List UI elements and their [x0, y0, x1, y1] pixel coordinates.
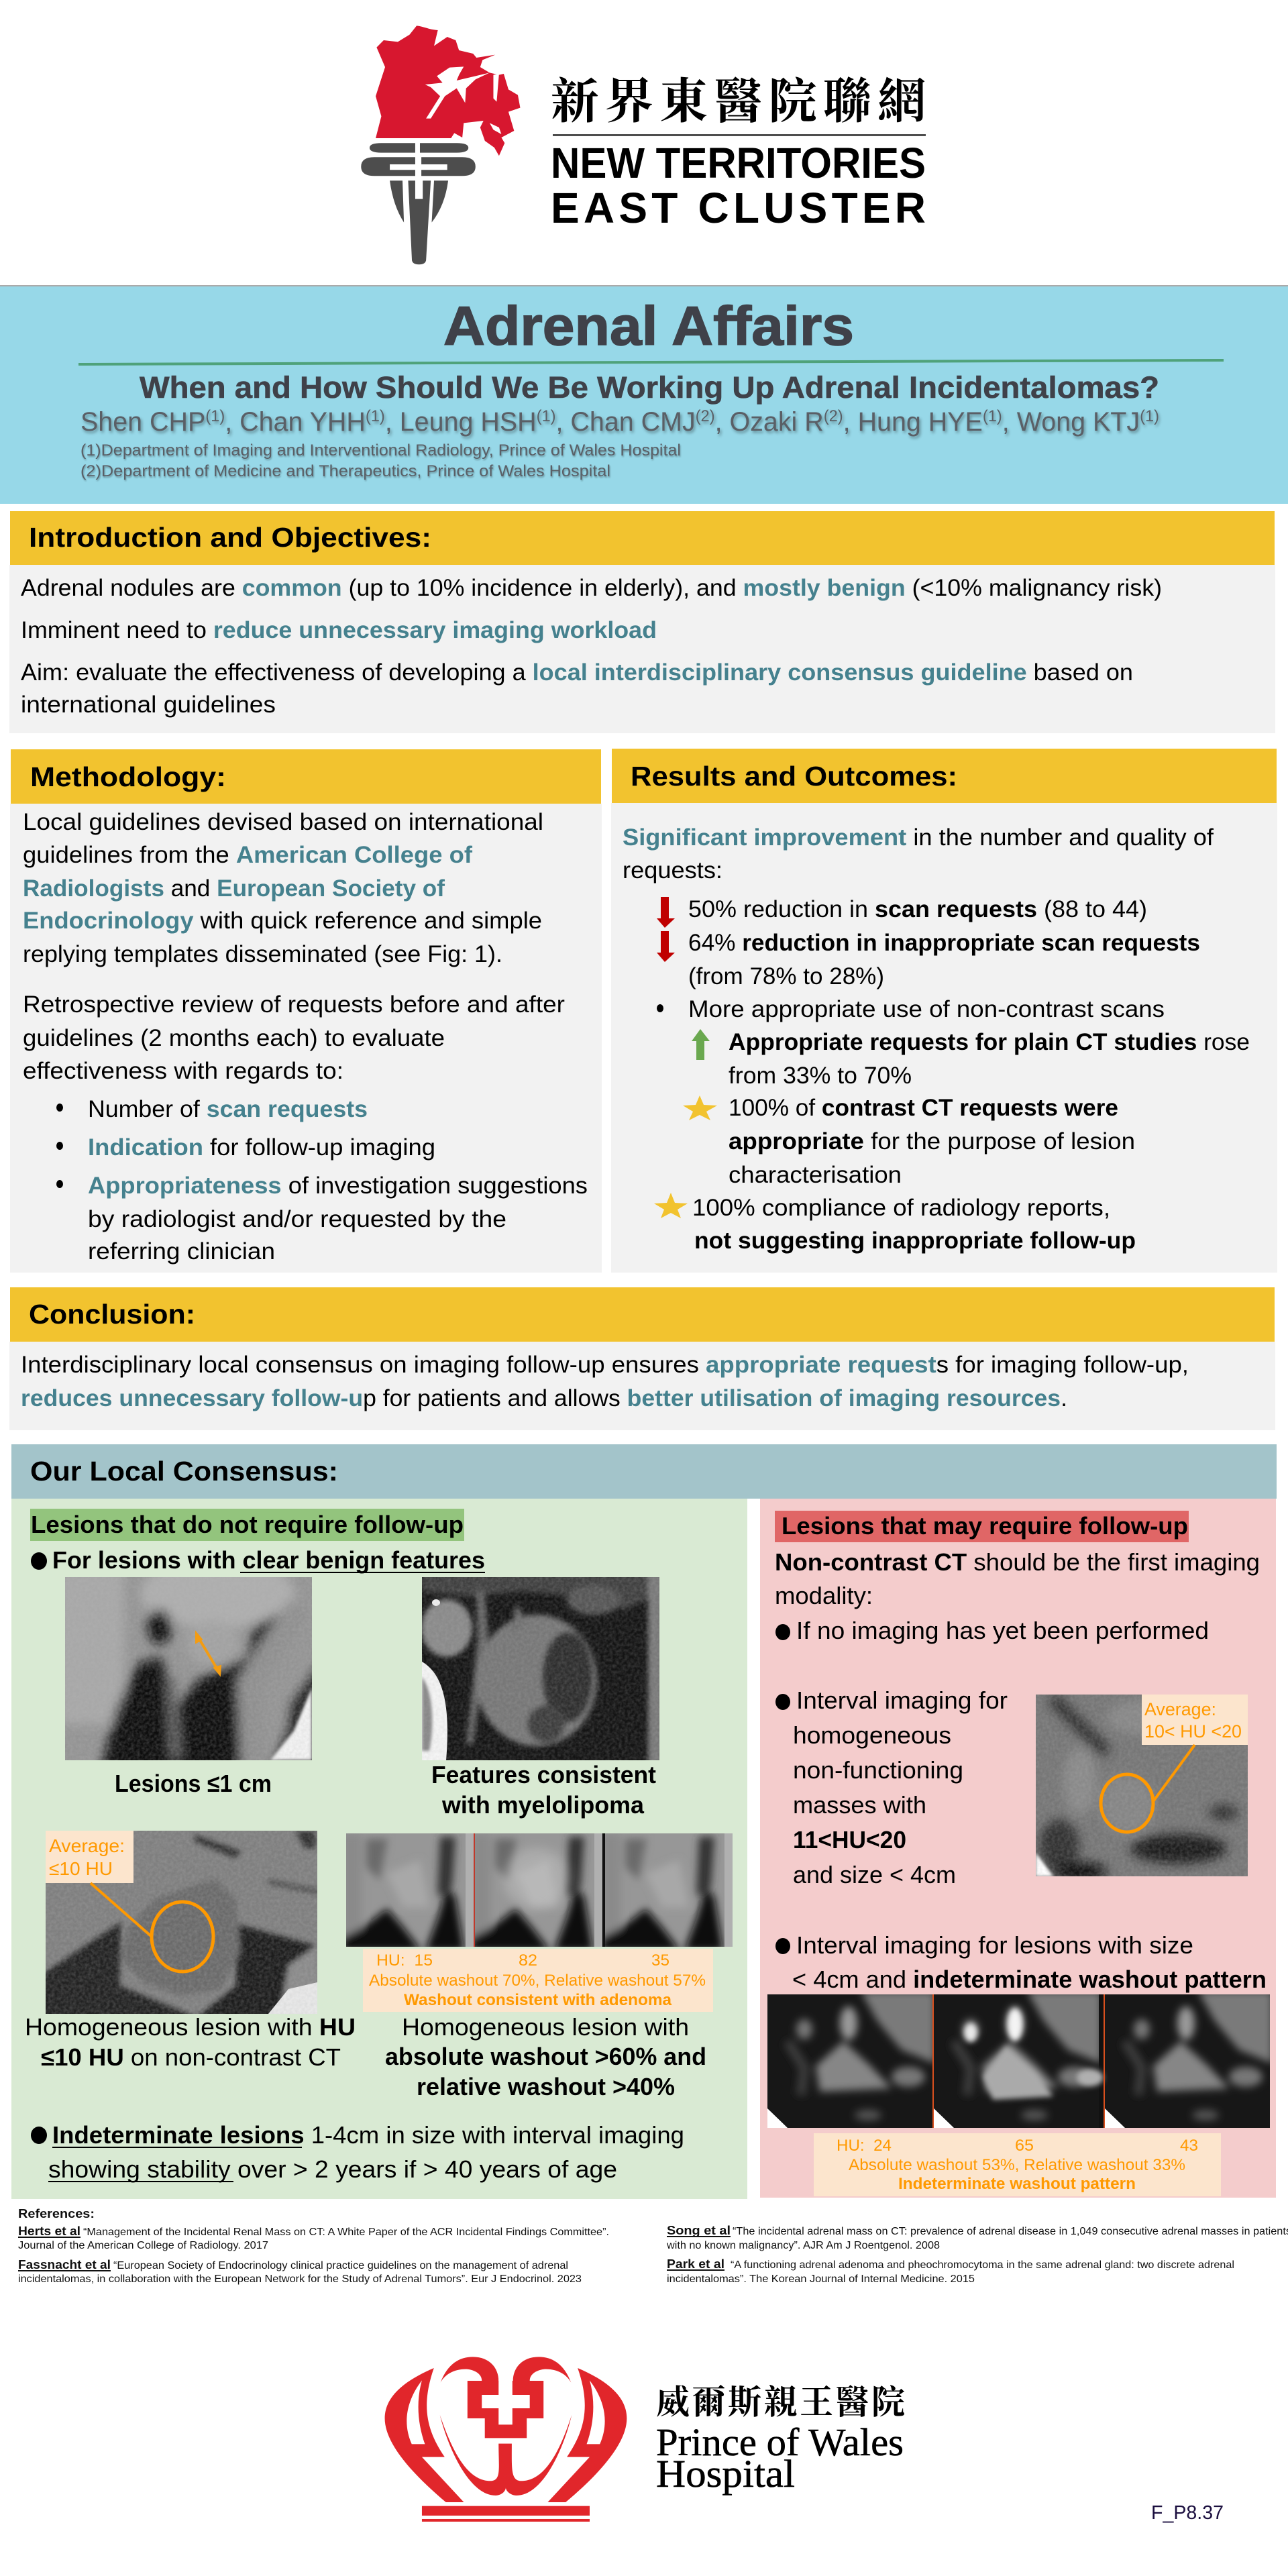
authors: , Hung HYE — [843, 407, 983, 437]
callout: indeterminate washout values: HU: 24 — [837, 2137, 892, 2155]
text block: Endocrinology with quick reference and simple — [23, 908, 542, 934]
reference: Fassnacht: Fassnacht et al — [18, 2258, 111, 2271]
bullet: indeterminate lesions: Indeterminate lesions 1-4cm in size with interval imaging — [52, 2121, 684, 2149]
text block: Adrenal nodules are common (up to 10% incidence in elderly), and mostly benign (<10% malignancy risk) — [21, 575, 1162, 601]
text block: Local guidelines devised based on international — [23, 809, 543, 835]
icon: green up arrow — [692, 1029, 710, 1060]
icon: red down arrow — [657, 897, 675, 928]
icon: hospital emblem — [385, 2357, 627, 2522]
authors: (2) — [696, 407, 715, 425]
panel: conclusion — [9, 1287, 1275, 1430]
heading: References: — [18, 2207, 95, 2220]
text block: from 33% to 70% — [729, 1063, 912, 1089]
reference: Park: Park et al — [667, 2257, 724, 2271]
logo English name: NEW TERRITORIES — [551, 139, 926, 187]
bullet list: by radiologist and/or requested by the — [88, 1206, 506, 1232]
callout: indeterminate washout values — [814, 2133, 1221, 2196]
caption: Lesions ≤1 cm — [115, 1770, 272, 1797]
text block: requests: — [623, 857, 722, 883]
heading: Our Local Consensus: — [30, 1456, 338, 1487]
authors: (2) — [824, 407, 843, 425]
caption: Homogeneous lesion with HU — [25, 2013, 356, 2041]
bullet: indeterminate lesions — [31, 2121, 684, 2183]
authors: , Chan YHH — [225, 407, 366, 437]
callout: average 10 to 20 HU — [1101, 1695, 1248, 1832]
text block: not suggesting inappropriate follow-up — [694, 1228, 1136, 1254]
bullet: homogeneous masses: homogeneous — [793, 1721, 951, 1749]
references — [18, 2207, 1288, 2285]
text block: Imminent need to reduce unnecessary imaging workload — [21, 617, 657, 643]
callout: indeterminate washout values: 65 — [1015, 2137, 1034, 2155]
bullet list: Indication for follow-up imaging — [88, 1134, 435, 1161]
text block: Significant improvement in the number and quality of — [623, 824, 1214, 851]
bullet: indeterminate washout: Interval imaging for lesions with size — [796, 1931, 1193, 1959]
bullet list: Number of scan requests — [88, 1096, 368, 1122]
callout: washout values: 82 — [519, 1951, 537, 1970]
reference: Park — [667, 2257, 1234, 2285]
caption: relative washout >40% — [417, 2073, 675, 2100]
caption — [385, 2013, 706, 2100]
text block: Retrospective review of requests before and after — [23, 991, 565, 1018]
callout: average 10 to 20 HU: 10< HU <20 — [1144, 1721, 1242, 1741]
affiliations: (1)Department of Imaging and Interventional Radiology, Prince of Wales Hospital — [80, 441, 681, 460]
caption: absolute washout >60% and — [385, 2043, 706, 2070]
text block — [21, 1352, 1189, 1411]
text block: Interdisciplinary local consensus on imaging follow-up ensures appropriate request s for imaging follow-up, — [21, 1352, 1189, 1378]
bullet: homogeneous masses: masses with — [793, 1791, 926, 1819]
text block: 50% reduction in scan requests (88 to 44) — [688, 896, 1147, 922]
bullet: indeterminate lesions: showing stability over > 2 years if > 40 years of age — [48, 2155, 617, 2183]
text block: 100% compliance of radiology reports, — [692, 1195, 1110, 1221]
panel: lesions that may require follow-up — [760, 1499, 1276, 2198]
panel: our local consensus — [11, 1444, 1277, 2199]
text block: Radiologists and European Society of — [23, 875, 445, 902]
caption: Features consistent — [431, 1761, 656, 1788]
bullet: homogeneous masses: 11<HU<20 — [793, 1826, 906, 1854]
image: CT myelolipoma — [421, 1573, 664, 1764]
reference: Park: “A functioning adrenal adenoma and pheochromocytoma in the same adrenal gland: two discrete adrenal — [731, 2259, 1234, 2271]
panel: introduction and objectives — [9, 511, 1275, 733]
callout: indeterminate washout values: Absolute washout 53%, Relative washout 33% — [849, 2156, 1185, 2174]
icon: torch emblem — [361, 25, 520, 264]
authors: , Ozaki R — [715, 407, 824, 437]
authors: , Wong KTJ — [1002, 407, 1140, 437]
text block — [623, 824, 1250, 1254]
bullet list: referring clinician — [88, 1238, 275, 1265]
icon: red down arrow — [657, 931, 675, 962]
authors: , Leung HSH — [385, 407, 537, 437]
callout: indeterminate washout values: 43 — [1180, 2137, 1198, 2155]
reference: Park: incidentalomas”. The Korean Journal of Internal Medicine. 2015 — [667, 2273, 975, 2285]
reference: Herts: Journal of the American College of Radiology. 2017 — [18, 2240, 268, 2251]
icon: star — [683, 1095, 717, 1120]
text block: Aim: evaluate the effectiveness of developing a local interdisciplinary consensus guideline based on — [21, 659, 1133, 686]
affiliations: (2)Department of Medicine and Therapeutics, Prince of Wales Hospital — [80, 462, 610, 480]
affiliations — [80, 441, 681, 480]
panel: results and outcomes — [611, 749, 1277, 1273]
reference: Song: Song et al — [667, 2224, 731, 2237]
caption: with myelolipoma — [441, 1791, 645, 1819]
subtitle: When and How Should We Be Working Up Adrenal Incidentalomas? — [140, 370, 1159, 405]
text block: More appropriate use of non-contrast scans — [688, 996, 1165, 1022]
caption: Homogeneous lesion with — [402, 2013, 689, 2041]
text block: appropriate for the purpose of lesion — [729, 1128, 1135, 1155]
bullet: homogeneous masses: and size < 4cm — [793, 1861, 956, 1888]
text block: characterisation — [729, 1162, 902, 1188]
text block — [775, 1548, 1260, 1609]
bullet list — [56, 1096, 588, 1265]
callout: washout values: 35 — [651, 1951, 669, 1970]
heading: Introduction and Objectives: — [29, 522, 431, 553]
logo Chinese name: 新界東醫院聯網 — [551, 75, 926, 129]
authors: (1) — [205, 407, 225, 425]
text block: Non-contrast CT should be the first imaging — [775, 1548, 1260, 1576]
text block: reduces unnecessary follow-up for patients and allows better utilisation of imaging resources . — [21, 1385, 1067, 1411]
callout: indeterminate washout values: Indeterminate washout pattern — [898, 2175, 1136, 2193]
authors: Shen CHP — [80, 407, 207, 437]
heading: Conclusion: — [29, 1299, 195, 1330]
bullet: no imaging performed: If no imaging has yet been performed — [796, 1617, 1209, 1644]
logo Chinese name: 威爾斯親王醫院 — [656, 2383, 905, 2421]
caption — [431, 1761, 656, 1819]
bullet: indeterminate washout: < 4cm and indeterminate washout pattern — [792, 1966, 1267, 1993]
image: CT homogeneous lesion with label — [40, 1831, 319, 2019]
reference: Fassnacht — [18, 2258, 582, 2285]
text block: Appropriate requests for plain CT studies rose — [729, 1029, 1250, 1055]
text block: 100% of contrast CT requests were — [729, 1095, 1118, 1121]
bullet list: Appropriateness of investigation suggestions — [88, 1173, 588, 1199]
reference: Herts: Herts et al — [18, 2224, 80, 2238]
callout: washout values: Absolute washout 70%, Relative washout 57% — [369, 1972, 706, 1990]
reference: Herts: “Management of the Incidental Renal Mass on CT: A White Paper of the ACR Incidental Findings Committee”. — [83, 2226, 609, 2238]
callout: washout values — [363, 1949, 713, 2012]
callout: washout values: HU: 15 — [376, 1951, 433, 1970]
bullet: homogeneous masses: non-functioning — [793, 1756, 963, 1784]
bullet: homogeneous masses — [775, 1686, 1008, 1888]
logo: New Territories East Cluster: EAST CLUSTER — [551, 184, 926, 232]
reference: Song — [666, 2224, 1288, 2251]
text block: 64% reduction in inappropriate scan requests — [688, 930, 1200, 956]
logo English name: Prince of Wales — [656, 2420, 904, 2464]
reference: Fassnacht: “European Society of Endocrinology clinical practice guidelines on the management of adrenal — [113, 2260, 568, 2271]
text block: international guidelines — [21, 692, 276, 718]
image: CT indeterminate lesion — [1036, 1695, 1248, 1881]
reference: Herts — [18, 2224, 609, 2251]
text block — [23, 809, 565, 1084]
panel: methodology — [10, 749, 602, 1273]
poster code: F_P8.37 — [1151, 2502, 1224, 2524]
heading: red highlight: Lesions that may require follow-up — [782, 1512, 1188, 1540]
reference: Song: “The incidental adrenal mass on CT: prevalence of adrenal disease in 1,049 consecutive adrenal masses in patients — [733, 2226, 1288, 2237]
bullet: indeterminate washout — [775, 1931, 1267, 1993]
text block — [21, 575, 1162, 718]
bullet: homogeneous masses: Interval imaging for — [796, 1686, 1008, 1714]
logo: Prince of Wales Hospital — [385, 2357, 905, 2522]
callout: average under 10 HU — [46, 1831, 213, 1972]
callout: average under 10 HU: ≤10 HU — [49, 1858, 113, 1879]
text block: guidelines (2 months each) to evaluate — [23, 1025, 445, 1051]
icon: star — [654, 1193, 688, 1218]
authors: (1) — [366, 407, 385, 425]
authors: (1) — [1140, 407, 1159, 425]
callout: average 10 to 20 HU: Average: — [1144, 1699, 1216, 1719]
caption — [25, 2013, 356, 2071]
authors: (1) — [537, 407, 556, 425]
title: Adrenal Affairs — [443, 296, 854, 357]
text block: guidelines from the American College of — [23, 842, 472, 868]
bullet: clear benign features: For lesions with clear benign features — [52, 1546, 485, 1574]
authors: , Chan CMJ — [556, 407, 696, 437]
heading: green highlight: Lesions that do not require follow-up — [31, 1511, 464, 1538]
callout: average under 10 HU: Average: — [49, 1835, 125, 1856]
heading: Methodology: — [30, 761, 226, 792]
logo English name — [656, 2420, 904, 2496]
image: CT indeterminate washout series — [767, 1991, 1273, 2128]
logo English name: Hospital — [656, 2452, 795, 2496]
reference: Song: with no known malignancy”. AJR Am J Roentgenol. 2008 — [666, 2240, 940, 2251]
heading: Results and Outcomes: — [631, 761, 957, 792]
title banner — [0, 285, 1288, 504]
text block: modality: — [775, 1582, 873, 1609]
image: CT washout series — [343, 1833, 733, 1951]
text block: replying templates disseminated (see Fig: 1). — [23, 941, 502, 967]
text block: effectiveness with regards to: — [23, 1058, 343, 1084]
panel: lesions that do not require follow-up — [11, 1499, 747, 2199]
reference: Fassnacht: incidentalomas, in collaboration with the European Network for the Study of Adrenal Tumors”. Eur J Endocrinol. 2023 — [18, 2273, 582, 2285]
authors: (1) — [983, 407, 1002, 425]
callout: washout values: Washout consistent with adenoma — [404, 1991, 672, 2009]
text block: (from 78% to 28%) — [688, 963, 884, 989]
image: CT lesion under 1 cm — [65, 1577, 312, 1760]
logo: New Territories East Cluster — [361, 25, 926, 264]
caption: ≤10 HU on non-contrast CT — [41, 2043, 341, 2071]
